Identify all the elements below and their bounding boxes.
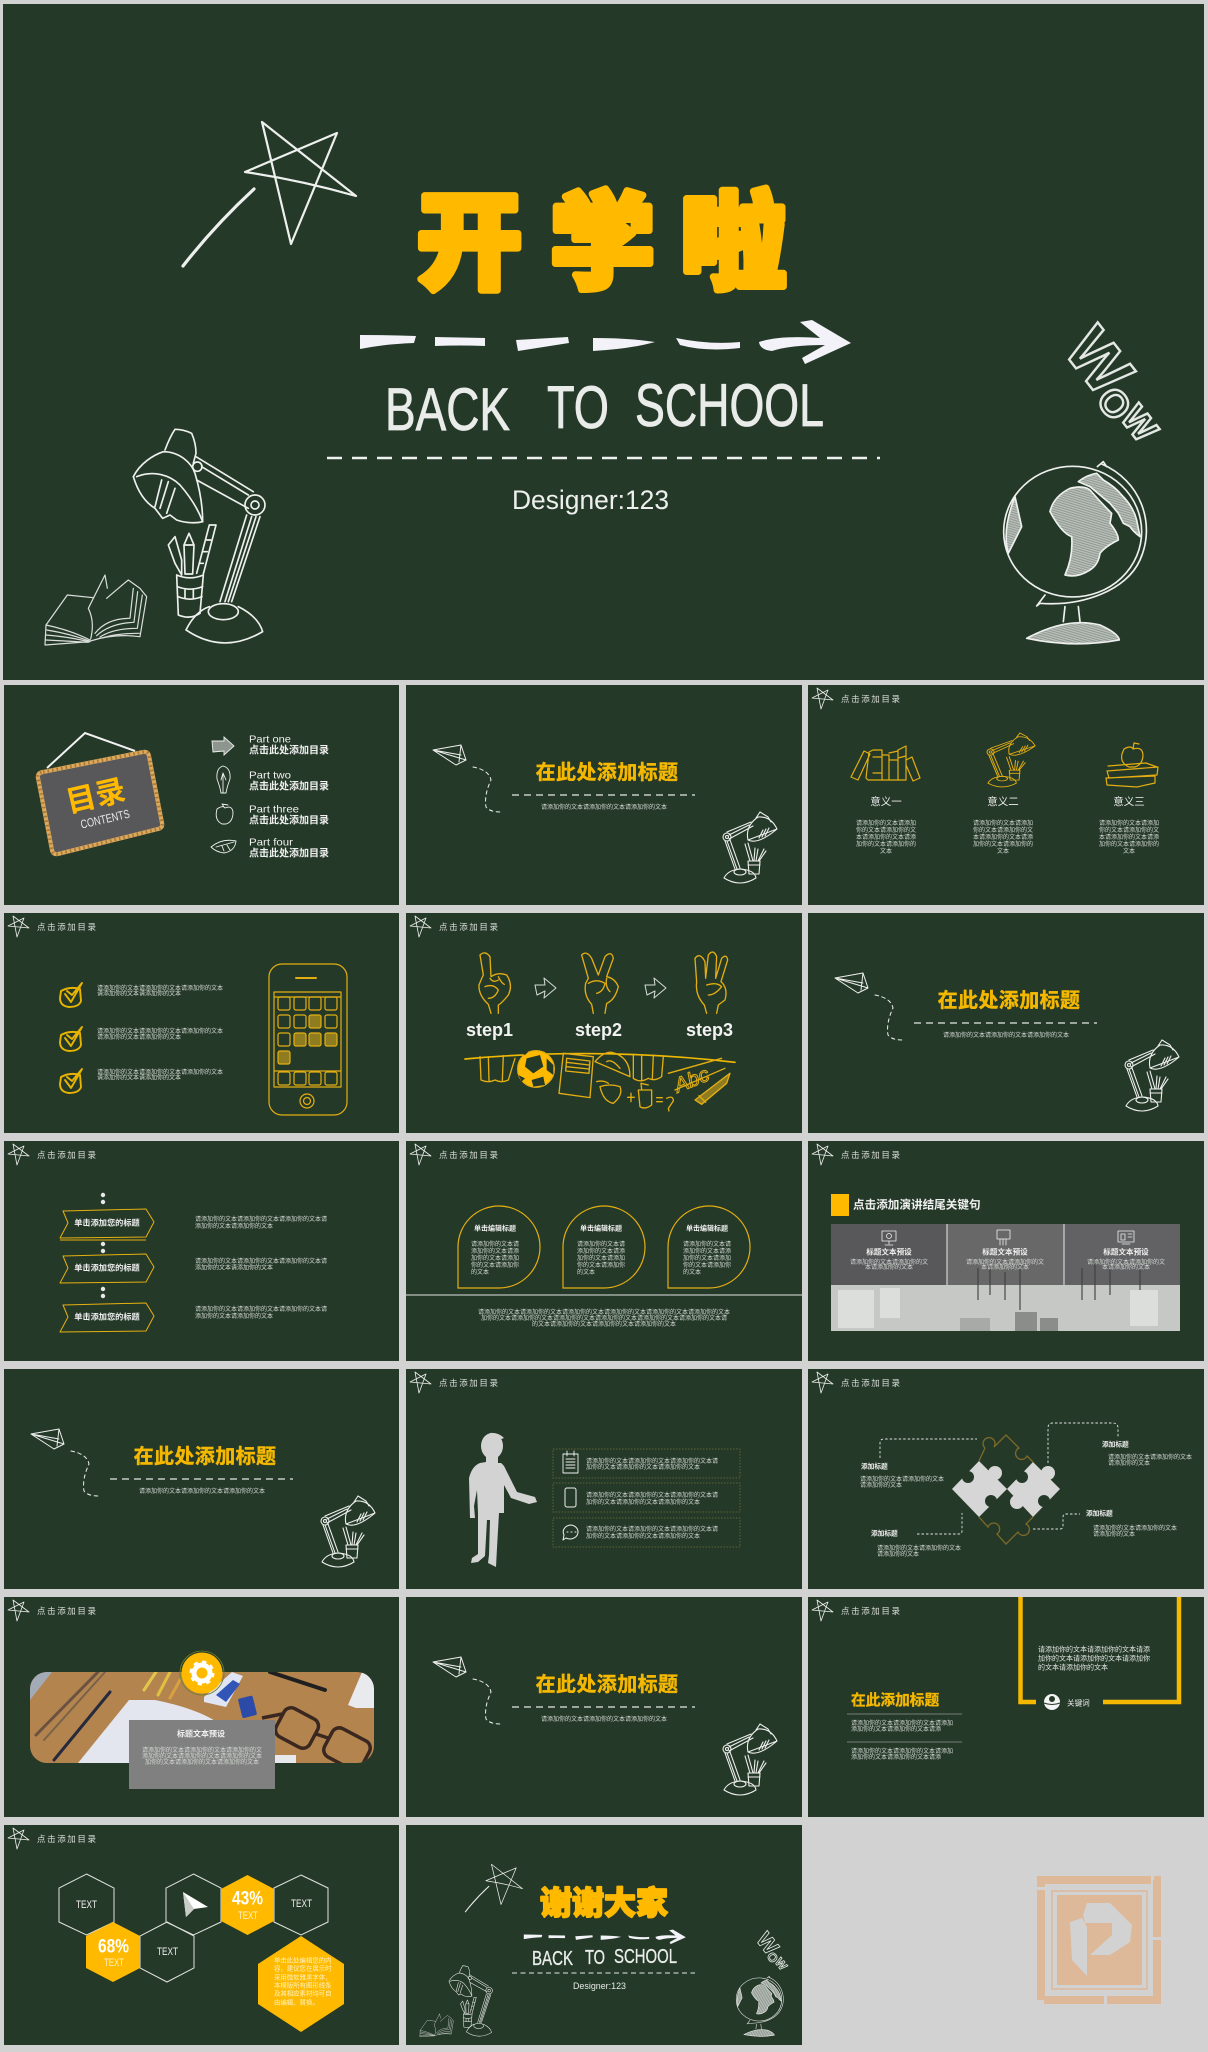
section subtitle: 请添加你的文本请添加你的文本请添加你的文本 <box>943 1031 1069 1039</box>
desk photo <box>30 1672 374 1773</box>
icon: globe <box>736 1976 783 2036</box>
text: item two <box>97 1027 223 1041</box>
icon: open book <box>45 575 147 645</box>
icon: paper plane <box>433 745 500 812</box>
caption box: 标题文本预设 <box>177 1728 225 1738</box>
text: first paragraph: 添加你的文本请添加你的文本请添 <box>851 1725 941 1733</box>
text: meaning one: 加你的文本请添加你的 <box>856 840 916 848</box>
school doodle band: Abc <box>669 1063 713 1098</box>
text: meaning one: 请添加你的文本请添加 <box>856 819 916 827</box>
teardrop three: 单击编辑标题 <box>686 1224 728 1232</box>
subtitle: back to school <box>532 1946 677 1970</box>
banner one: 单击添加您的标题 <box>74 1218 140 1228</box>
label: right bottom: 请添加你的文本请添加你的文本 <box>1093 1524 1177 1532</box>
column text three: 本请添加你的文本 <box>1102 1263 1150 1271</box>
hexagon: text left <box>59 1874 114 1935</box>
subtitle: back to school: TO <box>547 374 609 441</box>
text: first paragraph <box>851 1719 953 1733</box>
header label: 点击添加目录 <box>439 922 500 932</box>
hexagon: description <box>258 1936 344 2032</box>
text: first paragraph: 请添加你的文本请添加你的文本请添加 <box>851 1719 953 1727</box>
wow lettering: W <box>1051 313 1148 408</box>
box one <box>553 1449 740 1478</box>
hexagon: description: 本模版所有图形线条 <box>274 1980 332 1990</box>
header label: 点击添加目录 <box>37 1606 98 1616</box>
icon: presentation board one <box>882 1231 896 1245</box>
icon: arrow <box>212 737 234 755</box>
contents sign <box>38 752 162 854</box>
slide heading: 点击添加演讲结尾关键句 <box>853 1198 981 1212</box>
contents list <box>249 734 329 860</box>
hexagon: description: 单击此处编辑您的内 <box>274 1956 332 1964</box>
panel: person slide <box>406 1369 802 1589</box>
section title: 在此处添加标题 <box>134 1445 276 1468</box>
text: banner two body: 添加你的文本请添加你的文本 <box>195 1264 273 1272</box>
icon: header star <box>410 1144 431 1165</box>
teardrop three <box>668 1206 750 1288</box>
icon: apple on books <box>1106 743 1158 787</box>
section subtitle: 请添加你的文本请添加你的文本请添加你的文本 <box>541 1715 667 1723</box>
panel: hexagon slide <box>4 1825 399 2045</box>
icon: header star <box>812 1144 833 1165</box>
text: meaning three <box>1099 795 1159 855</box>
contents list: Part three <box>249 804 299 816</box>
icon: header star <box>8 1144 29 1165</box>
text: meaning two: 请添加你的文本请添加 <box>973 819 1033 827</box>
icon: presentation board three <box>1118 1231 1134 1244</box>
icon: lamp <box>321 1496 375 1567</box>
icon: header star <box>410 916 431 937</box>
text: second paragraph: 请添加你的文本请添加你的文本请添加 <box>851 1747 953 1755</box>
text: banner one body: 请添加你的文本请添加你的文本请添加你的文本请 <box>195 1215 327 1223</box>
banner two <box>60 1254 154 1283</box>
panel: section slide one <box>406 685 802 905</box>
hexagon: text lower: TEXT <box>157 1946 178 1958</box>
text: meaning one: 本请添加你的文本请添 <box>856 833 916 841</box>
panel: meaning slide <box>808 685 1204 905</box>
teardrop two: 你的文本请添加你 <box>577 1261 625 1269</box>
text: meaning three: 加你的文本请添加你的 <box>1099 840 1159 848</box>
icon: shooting star <box>183 122 356 266</box>
icon: header star <box>812 688 833 709</box>
header label: 点击添加目录 <box>37 1834 98 1844</box>
teardrop two <box>563 1206 645 1288</box>
teardrop three: 添加你的文本请添 <box>683 1247 731 1255</box>
label: left bottom: 添加标题 <box>871 1528 898 1538</box>
panel: steps slide <box>406 913 802 1133</box>
step labels <box>466 1020 733 1040</box>
text: meaning one: 意义一 <box>870 795 902 808</box>
icon: lamp <box>1125 1040 1179 1111</box>
icon: header star <box>8 916 29 937</box>
teardrop three: 请添加你的文本请 <box>683 1240 731 1248</box>
icon: check one <box>60 983 82 1007</box>
panel: puzzle slide <box>808 1369 1204 1589</box>
header label: 点击添加目录 <box>841 694 902 704</box>
slide title: 在此添加标题 <box>851 1692 939 1709</box>
column text two <box>966 1246 1044 1271</box>
label: right bottom: 添加标题 <box>1086 1508 1113 1518</box>
banner three <box>60 1303 154 1332</box>
box two <box>553 1483 740 1512</box>
text: meaning two: 你的文本请添加你的文 <box>973 826 1033 834</box>
text: item one: 请添加你的文本请添加你的文本 <box>97 990 181 998</box>
text: item three: 请添加你的文本请添加你的文本 <box>97 1074 181 1082</box>
arrow: dashed chalk arrow <box>360 320 851 364</box>
icon: globe <box>1004 462 1146 644</box>
subtitle: back to school: SCHOOL <box>614 1946 677 1968</box>
icon: apple <box>216 804 233 824</box>
column text one: 请添加你的文本请添加你的文 <box>850 1258 928 1266</box>
header label: 点击添加目录 <box>37 1150 98 1160</box>
panel: titled list slide <box>4 1141 399 1361</box>
column text two: 本请添加你的文本 <box>981 1263 1029 1271</box>
text: banner three body: 添加你的文本请添加你的文本 <box>195 1312 273 1320</box>
icon: paper plane <box>31 1429 98 1496</box>
text: meaning one <box>856 795 916 855</box>
box two: 请添加你的文本请添加你的文本请添加你的文本请 <box>586 1491 718 1499</box>
teardrop two: 请添加你的文本请 <box>577 1240 625 1248</box>
label: left bottom <box>871 1528 961 1558</box>
text: meaning two: 加你的文本请添加你的 <box>973 840 1033 848</box>
teardrop one: 添加你的文本请添 <box>471 1247 519 1255</box>
text: banner three body <box>195 1305 327 1320</box>
yellow bracket <box>1020 1597 1179 1702</box>
icon: presentation board two <box>997 1230 1010 1245</box>
icon: header star <box>812 1372 833 1393</box>
text: summary: 的文本请添加你的文本请添加你的文本请添加你的文本 <box>532 1320 676 1328</box>
hexagon: 68 percent: 68% <box>98 1936 129 1958</box>
wow lettering: O <box>764 1949 781 1966</box>
text: meaning two: 本请添加你的文本请添 <box>973 833 1033 841</box>
designer credit: Designer:123 <box>573 1981 626 1991</box>
wow lettering <box>751 1927 790 1973</box>
panel: section slide two <box>808 913 1204 1133</box>
icon: paper plane <box>433 1657 500 1724</box>
label: left top: 请添加你的文本请添加你的文本 <box>860 1475 944 1483</box>
teardrop three: 加你的文本请添加 <box>683 1254 731 1262</box>
contents list: 点击此处添加目录 <box>249 846 329 860</box>
hexagon: text right <box>274 1875 328 1935</box>
text: item one: 请添加你的文本请添加你的文本请添加你的文本 <box>97 984 223 992</box>
caption box: 添加你的文本请添加你的文本请添加你的文本 <box>142 1752 262 1760</box>
caption box: 加你的文本请添加你的文本请添加你的文本 <box>145 1758 259 1766</box>
icon: two finger hand <box>582 953 618 1013</box>
text: summary <box>478 1308 730 1328</box>
column text one: 本请添加你的文本 <box>865 1263 913 1271</box>
text: item three <box>97 1068 223 1082</box>
text: meaning two: 文本 <box>997 847 1009 855</box>
hexagon: plane <box>166 1874 221 1935</box>
panel: closing keyword slide <box>808 1141 1204 1361</box>
school doodle band <box>465 1051 735 1111</box>
hexagon: description: 由编辑、替换。 <box>274 1998 319 2006</box>
icon: lamp <box>723 812 777 883</box>
text: banner one body: 添加你的文本请添加你的文本 <box>195 1222 273 1230</box>
label: right bottom <box>1086 1508 1177 1538</box>
panel: cover slide <box>3 4 1204 680</box>
box one: 加你的文本请添加你的文本请添加你的文本 <box>586 1463 700 1471</box>
arrow: dashed chalk arrow <box>524 1930 686 1944</box>
text: banner three body: 请添加你的文本请添加你的文本请添加你的文本请 <box>195 1305 327 1313</box>
text: meaning three: 请添加你的文本请添加 <box>1099 819 1159 827</box>
header label: 点击添加目录 <box>841 1606 902 1616</box>
hexagon: 43 percent: 43% <box>232 1888 263 1910</box>
column text two: 标题文本预设 <box>982 1246 1028 1256</box>
icon: paper plane <box>835 973 902 1040</box>
header label: 点击添加目录 <box>841 1150 902 1160</box>
icon: books <box>851 746 920 781</box>
text: second paragraph: 添加你的文本请添加你的文本请添 <box>851 1753 941 1761</box>
hexagon: description: 采用微软雅黑字体， <box>274 1972 332 1982</box>
hexagon: 68 percent: TEXT <box>104 1957 124 1969</box>
label: right top: 请添加你的文本请添加你的文本 <box>1108 1453 1192 1461</box>
subtitle: back to school: TO <box>585 1947 605 1969</box>
teardrop one <box>458 1206 540 1288</box>
step labels: step1 <box>466 1020 513 1040</box>
text: meaning three: 你的文本请添加你的文 <box>1099 826 1159 834</box>
section title: 在此处添加标题 <box>536 1673 678 1696</box>
text: item three: 请添加你的文本请添加你的文本请添加你的文本 <box>97 1068 223 1076</box>
hexagon: text right: TEXT <box>291 1898 312 1910</box>
icon: leaf <box>211 840 236 853</box>
teardrop one: 单击编辑标题 <box>474 1224 516 1232</box>
contents list: 点击此处添加目录 <box>249 814 329 826</box>
panel: thank you slide <box>406 1825 802 2045</box>
banner one <box>60 1209 154 1240</box>
header label: 点击添加目录 <box>439 1150 500 1160</box>
header label: 点击添加目录 <box>841 1378 902 1388</box>
text: bracket body <box>1038 1644 1150 1672</box>
designer credit: Designer:123 <box>512 485 669 515</box>
column text three: 请添加你的文本请添加你的文 <box>1087 1258 1165 1266</box>
teardrop three: 的文本 <box>683 1268 701 1276</box>
teardrop two: 添加你的文本请添 <box>577 1247 625 1255</box>
icon: shooting star <box>465 1864 522 1912</box>
text: bracket body: 的文本请添加你的文本 <box>1038 1662 1108 1672</box>
watermark stamp <box>1041 1880 1157 2000</box>
panel: photo slide <box>4 1597 399 1817</box>
teardrop one: 你的文本请添加你 <box>471 1261 519 1269</box>
panel: section slide three <box>4 1369 399 1589</box>
thank you title: 谢谢大家 <box>540 1878 668 1924</box>
section title: 在此处添加标题 <box>938 989 1080 1012</box>
column text one <box>850 1246 928 1271</box>
dashed connectors <box>880 1423 1118 1534</box>
hexagon: description: 及其相应素材均可自 <box>274 1988 332 1998</box>
label: right bottom: 请添加你的文本 <box>1093 1530 1135 1538</box>
label: right top: 请添加你的文本 <box>1108 1459 1150 1467</box>
hexagon: text left: TEXT <box>76 1899 97 1911</box>
subtitle: back to school: BACK <box>532 1948 573 1970</box>
teardrop one: 请添加你的文本请 <box>471 1240 519 1248</box>
icon: open book <box>420 2014 453 2037</box>
text: banner two body: 请添加你的文本请添加你的文本请添加你的文本请 <box>195 1257 327 1265</box>
contents list: Part two <box>249 770 291 782</box>
section title: 在此处添加标题 <box>536 761 678 784</box>
contents list: Part one <box>249 734 291 746</box>
box three: 加你的文本请添加你的文本请添加你的文本 <box>586 1532 700 1540</box>
text: summary: 请添加你的文本请添加你的文本请添加你的文本请添加你的文本请添加你的文本请添加你的文本 <box>478 1308 730 1316</box>
icon: header star <box>8 1828 29 1849</box>
box one: 请添加你的文本请添加你的文本请添加你的文本请 <box>586 1457 718 1465</box>
subtitle: back to school <box>385 372 824 443</box>
box three <box>553 1518 740 1547</box>
text: meaning one: 文本 <box>880 847 892 855</box>
hexagon: 43 percent: TEXT <box>238 1910 258 1922</box>
label: right top: 添加标题 <box>1102 1440 1129 1448</box>
wow lettering <box>1051 313 1166 449</box>
icon: gear badge <box>180 1651 224 1695</box>
header label: 点击添加目录 <box>37 922 98 932</box>
contents sign: CONTENTS <box>79 807 131 832</box>
sign hanger <box>47 733 135 768</box>
header label: 点击添加目录 <box>439 1378 500 1388</box>
subtitle: back to school: SCHOOL <box>635 372 824 439</box>
step labels: step3 <box>686 1020 733 1040</box>
subtitle: back to school: BACK <box>385 376 510 443</box>
hexagon: text lower <box>140 1922 194 1982</box>
connector dots <box>101 1193 105 1298</box>
text: meaning three: 意义三 <box>1113 795 1145 808</box>
wow lettering: O <box>1088 380 1139 429</box>
image strip <box>831 1224 1180 1331</box>
hexagon: description: 容，建议您在展示时 <box>274 1964 332 1972</box>
contents list: 点击此处添加目录 <box>249 780 329 792</box>
text: meaning two <box>973 795 1033 855</box>
wow lettering: W <box>772 1955 790 1973</box>
yellow marker <box>831 1194 849 1216</box>
teardrop two: 的文本 <box>577 1268 595 1276</box>
caption box <box>129 1720 275 1789</box>
section subtitle: 请添加你的文本请添加你的文本请添加你的文本 <box>541 803 667 811</box>
teardrop one: 加你的文本请添加 <box>471 1254 519 1262</box>
puzzle graphic <box>952 1435 1060 1544</box>
person silhouette <box>469 1433 537 1567</box>
teardrop two: 单击编辑标题 <box>580 1224 622 1232</box>
label: left top: 请添加你的文本 <box>860 1481 902 1489</box>
label: right top <box>1102 1440 1192 1467</box>
wow lettering: W <box>1113 397 1166 449</box>
label: left bottom: 请添加你的文本请添加你的文本 <box>877 1544 961 1552</box>
box two: 加你的文本请添加你的文本请添加你的文本 <box>586 1498 700 1506</box>
text: bracket body: 请添加你的文本请添加你的文本请添 <box>1038 1644 1150 1654</box>
icon: three finger hand <box>695 952 728 1013</box>
icon: check three <box>60 1069 82 1093</box>
wow lettering: W <box>751 1927 784 1959</box>
column text two: 请添加你的文本请添加你的文 <box>966 1258 1044 1266</box>
column text three <box>1087 1246 1165 1271</box>
column text one: 标题文本预设 <box>866 1246 912 1256</box>
teardrop one: 的文本 <box>471 1268 489 1276</box>
hexagon: 68 percent <box>86 1922 140 1982</box>
contents list: 点击此处添加目录 <box>249 744 329 756</box>
teardrop three: 你的文本请添加你 <box>683 1261 731 1269</box>
banner two: 单击添加您的标题 <box>74 1262 140 1272</box>
icon: check two <box>60 1027 82 1051</box>
panel: keyword bracket slide <box>808 1597 1204 1817</box>
icon: header star <box>8 1600 29 1621</box>
contents sign: 目录 <box>63 774 129 820</box>
text: meaning three: 文本 <box>1123 847 1135 855</box>
caption box: 请添加你的文本请添加你的文本请添加你的文 <box>142 1746 262 1754</box>
section subtitle: 请添加你的文本请添加你的文本请添加你的文本 <box>139 1487 265 1495</box>
box three: 请添加你的文本请添加你的文本请添加你的文本请 <box>586 1525 718 1533</box>
icon: header star <box>812 1600 833 1621</box>
text: summary: 加你的文本请添加你的文本请添加你的文本请添加你的文本请添加你的文本请添加你的文本请 <box>481 1314 727 1322</box>
icon: light bulb <box>217 766 230 793</box>
text: second paragraph <box>851 1747 953 1761</box>
text: bracket body: 加你的文本请添加你的文本请添加你 <box>1038 1654 1150 1662</box>
banner three: 单击添加您的标题 <box>74 1312 140 1322</box>
label: left top: 添加标题 <box>861 1462 888 1470</box>
keyword label: 关键词 <box>1067 1698 1090 1708</box>
arrow: step two to three <box>645 978 666 998</box>
step labels: step2 <box>575 1020 622 1040</box>
contents list: Part four <box>249 836 294 848</box>
label: left bottom: 请添加你的文本 <box>877 1550 919 1558</box>
panel: teardrop slide <box>406 1141 802 1361</box>
text: item two: 请添加你的文本请添加你的文本 <box>97 1033 181 1041</box>
text: item two: 请添加你的文本请添加你的文本请添加你的文本 <box>97 1027 223 1035</box>
text: meaning one: 你的文本请添加你的文 <box>856 826 916 834</box>
icon: header star <box>410 1372 431 1393</box>
icon: one finger hand <box>479 953 510 1013</box>
panel: contents slide <box>4 685 399 905</box>
arrow: step one to two <box>535 978 556 998</box>
icon: lamp <box>723 1724 777 1795</box>
icon: keyword badge <box>1044 1694 1060 1710</box>
teardrop two: 加你的文本请添加 <box>577 1254 625 1262</box>
text: banner two body <box>195 1257 327 1272</box>
label: left top <box>860 1462 944 1489</box>
text: meaning three: 本请添加你的文本请添 <box>1099 833 1159 841</box>
text: meaning two: 意义二 <box>987 795 1019 808</box>
panel: checklist slide <box>4 913 399 1133</box>
panel: section slide four <box>406 1597 802 1817</box>
icon: desk lamp <box>133 429 265 643</box>
column text three: 标题文本预设 <box>1103 1246 1149 1256</box>
text: banner one body <box>195 1215 327 1230</box>
text: item one <box>97 984 223 998</box>
icon: smartphone <box>269 964 347 1115</box>
hexagon: 43 percent <box>221 1875 274 1935</box>
title: 开学啦 <box>417 159 786 311</box>
icon: yellow lamp <box>987 733 1035 787</box>
icon: desk lamp <box>449 1966 492 2036</box>
